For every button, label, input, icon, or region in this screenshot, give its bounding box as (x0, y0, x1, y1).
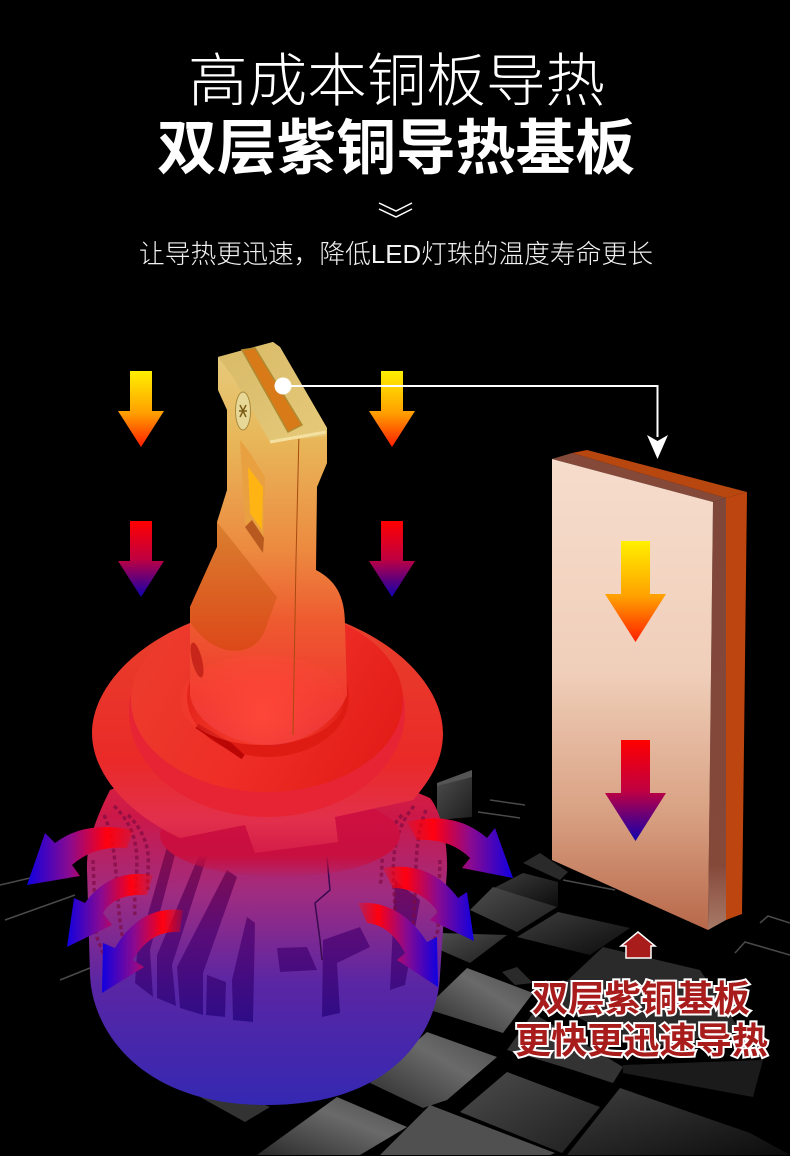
arrow: hot left (118, 371, 164, 447)
LED chip: top (242, 348, 302, 432)
dome lower lip (129, 607, 405, 817)
connector line (274, 378, 668, 459)
floor: dark checker tiles (0, 770, 790, 1155)
arrow: cool left (118, 521, 164, 597)
icon: double chevron (379, 203, 412, 217)
head top face (218, 342, 327, 442)
window bottom (245, 520, 264, 553)
arrow: cool right (369, 521, 415, 597)
neck underside scoop (190, 522, 277, 651)
icon: up house arrow (621, 932, 655, 958)
head rim highlight (270, 432, 326, 442)
copper plate (552, 450, 747, 930)
title line 1: 高成本铜板导热 (188, 49, 605, 114)
connector dot (274, 378, 292, 394)
dome ring (131, 608, 403, 792)
neck highlight (180, 655, 344, 745)
bulb neck and head (190, 342, 347, 745)
callout line 2: 更快更迅速导热 (515, 1020, 768, 1061)
curved arrows: right (358, 818, 513, 987)
plate top brown (552, 453, 726, 502)
callout line 1: 双层紫铜基板 (532, 978, 750, 1019)
neck slot (188, 641, 206, 679)
heatsink fins (135, 843, 420, 1022)
side window (240, 440, 265, 553)
LED chip: side (248, 467, 263, 530)
neck collar (187, 637, 349, 757)
curved arrows: left (27, 827, 183, 993)
bulb base and heatsink (87, 760, 447, 1105)
screw (236, 392, 250, 430)
collar notch (197, 726, 243, 757)
arrow: hot right (369, 371, 415, 447)
plate arrow hot (605, 541, 666, 642)
heatsink side ribs (93, 806, 440, 965)
plate right brown (708, 498, 726, 930)
heatsink crack line (315, 857, 330, 960)
plate arrow cool (605, 740, 666, 841)
plate right orange (726, 492, 747, 920)
dome (92, 623, 443, 853)
plate top orange (572, 450, 747, 498)
connector arrowhead (647, 435, 668, 459)
LED bulb (87, 342, 447, 1105)
plate front (552, 459, 713, 930)
seam line (293, 432, 299, 735)
under-dome band (160, 793, 400, 877)
title line 2: 双层紫铜导热基板 (157, 115, 635, 182)
subtitle: 让导热更迅速，降低LED灯珠的温度寿命更长 (139, 239, 653, 269)
